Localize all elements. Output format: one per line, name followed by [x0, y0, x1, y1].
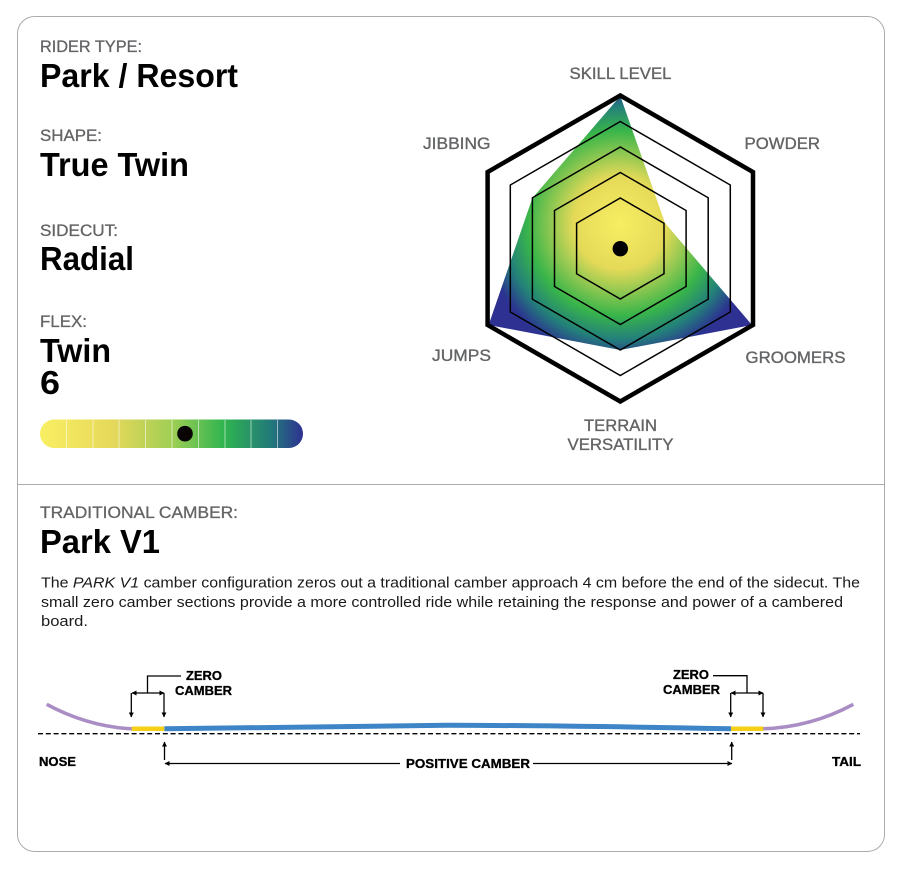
left zero camber callout: CAMBER: [175, 684, 232, 698]
axis labels: SKILL LEVEL: [570, 64, 672, 83]
flex: 6: [40, 364, 60, 401]
flex: Twin: [40, 332, 111, 369]
camber body text: [41, 574, 860, 630]
radar rings: [510, 122, 730, 376]
sidecut: [40, 221, 134, 277]
left zero camber callout: ZERO: [186, 669, 222, 683]
axis labels: GROOMERS: [746, 348, 846, 367]
right zero camber callout: ZERO: [673, 668, 709, 682]
axis labels: [423, 64, 846, 454]
camber diagram: [38, 668, 861, 771]
sidecut: SIDECUT:: [40, 221, 118, 240]
nose label: NOSE: [39, 755, 76, 769]
panel: board specs: [40, 37, 303, 448]
flex marker: [177, 426, 193, 442]
shape: True Twin: [40, 146, 189, 183]
positive camber span: POSITIVE CAMBER: [406, 757, 530, 771]
flex: FLEX:: [40, 312, 87, 331]
sidecut: Radial: [40, 240, 134, 277]
positive camber section: [164, 725, 731, 729]
flex scale bar: [40, 420, 303, 448]
radar chart: [423, 64, 846, 454]
shape: [40, 126, 189, 183]
zero camber sections: [132, 727, 763, 731]
axis labels: JIBBING: [423, 134, 490, 153]
tail label: TAIL: [832, 755, 861, 769]
baseline: [38, 733, 860, 735]
section divider: [18, 484, 884, 485]
camber heading: Park V1: [40, 523, 160, 560]
right zero camber callout: CAMBER: [663, 683, 720, 697]
axis labels: POWDER: [744, 134, 820, 153]
camber heading: TRADITIONAL CAMBER:: [40, 503, 238, 522]
rider type: Park / Resort: [40, 57, 238, 94]
camber heading: [40, 503, 238, 560]
radar filled area: [489, 96, 752, 350]
radar outer hexagon: [488, 96, 753, 402]
shape: SHAPE:: [40, 126, 102, 145]
camber body text: board.: [41, 613, 88, 630]
axis labels: VERSATILITY: [568, 435, 674, 454]
radar centre dot: [613, 241, 628, 256]
right zero camber callout: [663, 668, 763, 717]
rider type: [40, 37, 238, 94]
axis labels: JUMPS: [432, 346, 491, 365]
panel: camber description: [40, 503, 860, 630]
left zero camber callout: [131, 669, 232, 717]
axis labels: TERRAIN: [584, 416, 657, 435]
rider type: RIDER TYPE:: [40, 37, 142, 56]
camber body text: small zero camber sections provide a more controlled ride while retaining the response and power of a cambered: [41, 594, 843, 611]
board nose and tail: [47, 704, 132, 729]
camber body text: The PARK V1 camber configuration zeros out a traditional camber approach 4 cm before the end of the sidecut. The: [41, 574, 860, 592]
flex: [40, 312, 111, 401]
